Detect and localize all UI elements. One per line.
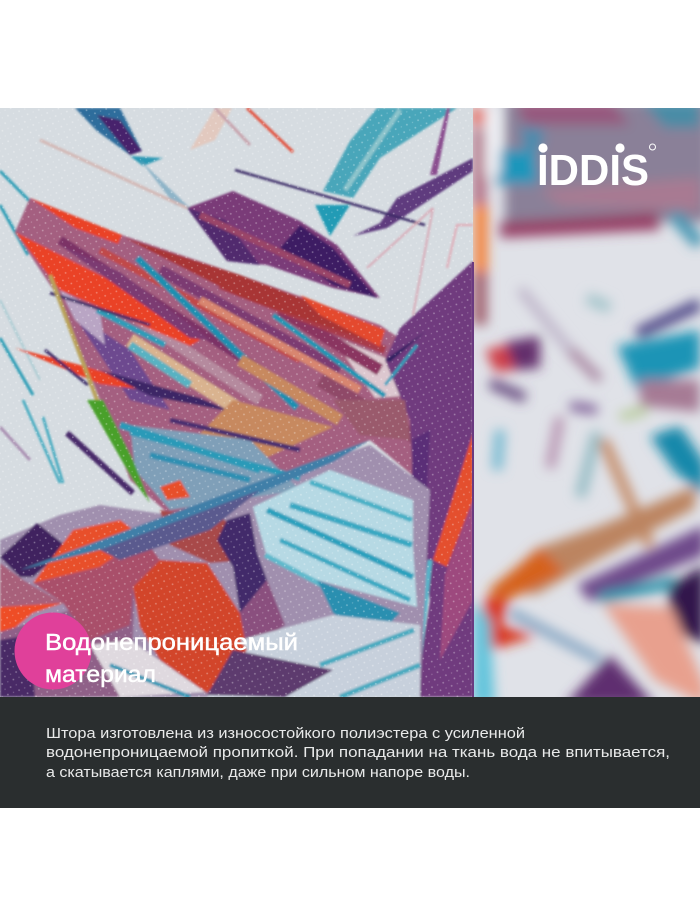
right purple edge: [385, 261, 473, 697]
droplet texture: [0, 108, 473, 697]
infographic canvas: [0, 108, 700, 808]
brand logo: IDDIS: IDDIS: [537, 146, 649, 195]
teal diagonal: [20, 440, 370, 570]
lower left colour blocks: [0, 523, 67, 577]
text block: description: водонепроницаемой пропиткой. При попадании на ткань вода не впитывается,: [46, 744, 670, 761]
text block: description: а скатывается каплями, даже при сильном напоре воды.: [46, 764, 470, 781]
panel: description band: [0, 697, 700, 808]
big purple blob: [187, 191, 380, 298]
mixed streak field: [15, 198, 430, 515]
panel: sharp fabric photo: [0, 108, 473, 697]
heading: waterproof material: [45, 629, 298, 687]
heading: waterproof material: материал: [45, 661, 156, 687]
heading: waterproof material: Водонепроницаемый: [45, 629, 298, 655]
panel: blurred fabric photo: [473, 100, 700, 705]
text block: description: [46, 725, 670, 781]
fabric edge: [472, 262, 474, 697]
text block: description: Штора изготовлена из износостойкого полиэстера с усиленной: [46, 725, 525, 742]
pink circle accent: [14, 612, 92, 690]
white and teal fan: [253, 470, 417, 607]
lower field base: [0, 445, 430, 697]
